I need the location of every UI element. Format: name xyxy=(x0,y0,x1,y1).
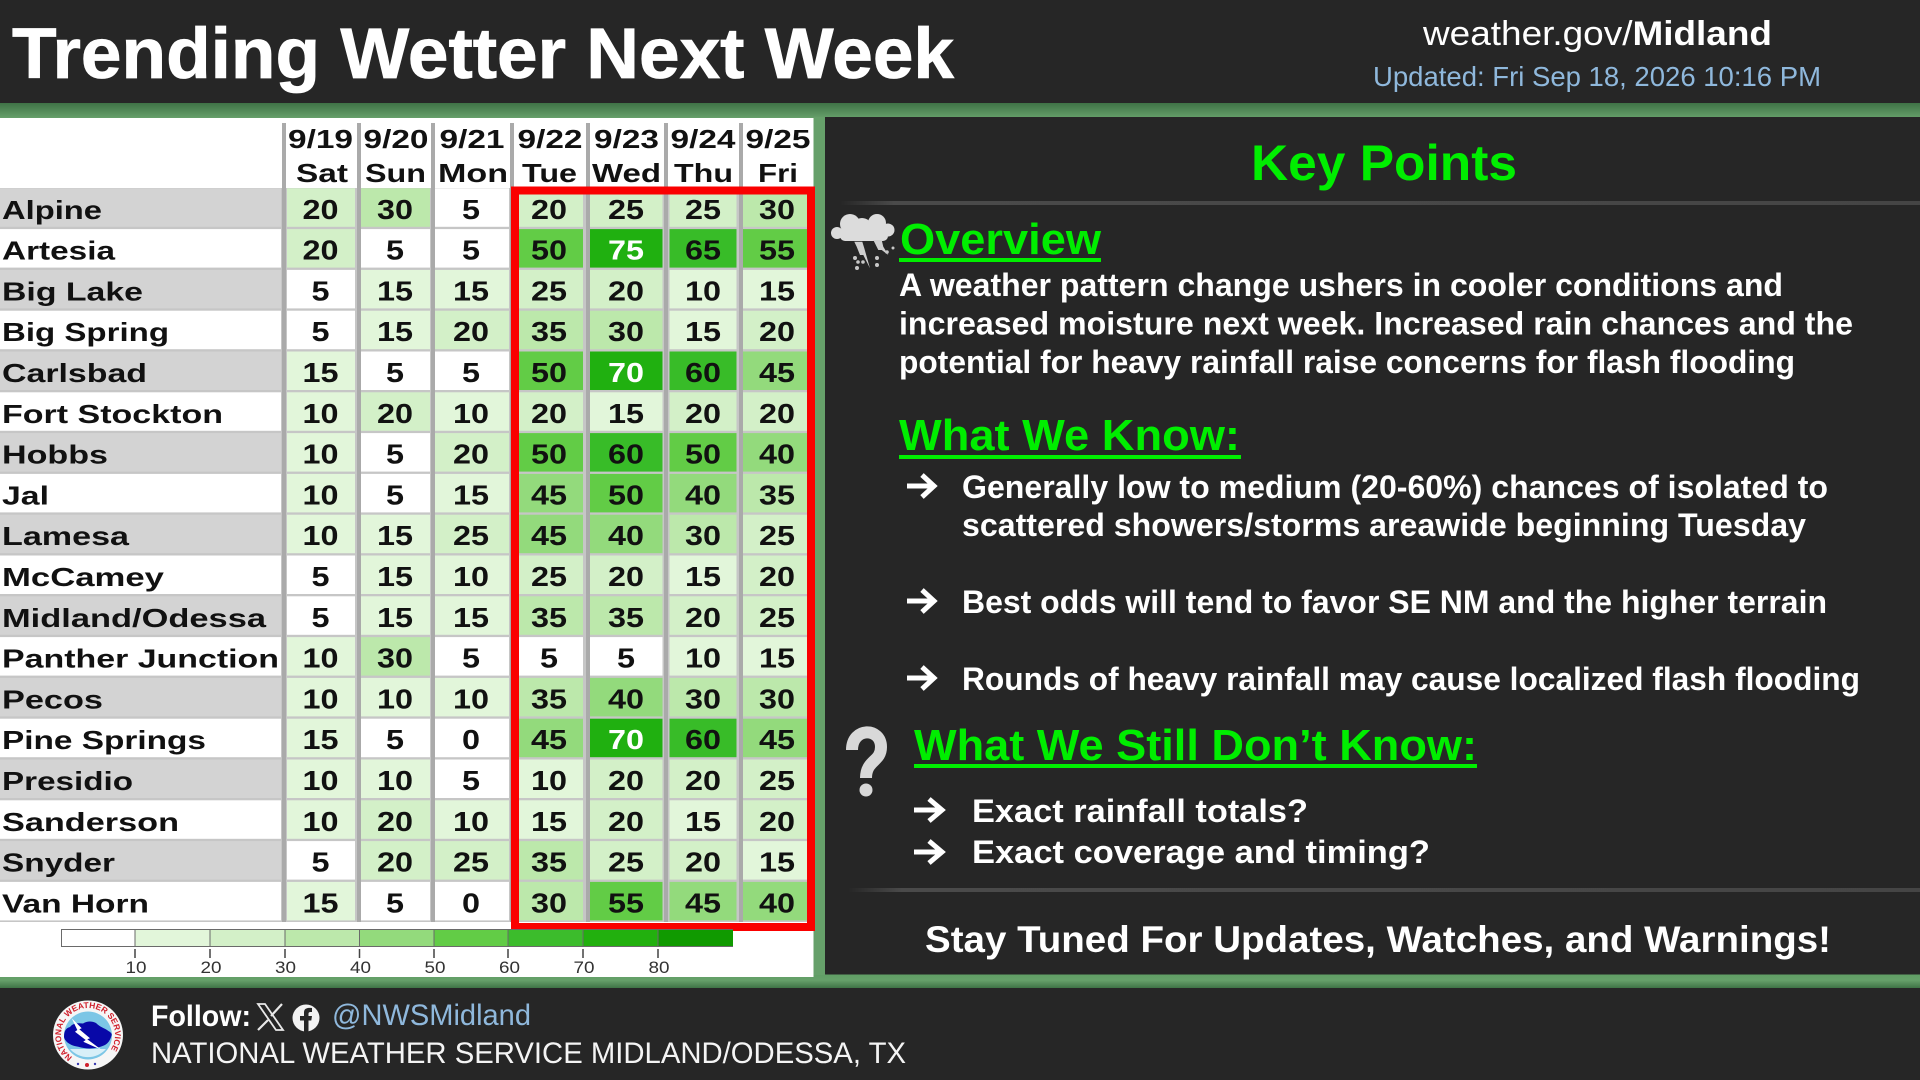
row: Alpine: 5 xyxy=(462,194,480,225)
color scale legend: 10 xyxy=(126,958,146,977)
row: Presidio: 20 xyxy=(685,765,721,796)
column headers: 9/25 xyxy=(746,124,810,154)
icon: question mark xyxy=(852,732,881,796)
row: Jal: 40 xyxy=(685,479,721,510)
row: Van Horn xyxy=(0,882,808,920)
color scale legend: 20 xyxy=(200,958,222,977)
row: Big Lake: 15 xyxy=(377,275,413,306)
row: Pecos: 35 xyxy=(531,683,567,714)
row: Snyder: 25 xyxy=(453,847,489,878)
still do not know heading: What We Still Don’t Know: xyxy=(914,721,1477,770)
bullet: chances: scattered showers/storms areawide beginning Tuesday xyxy=(962,507,1806,543)
row: Van Horn: 30 xyxy=(531,887,567,918)
row: Fort Stockton: 15 xyxy=(608,398,644,429)
row: Big Lake: 15 xyxy=(759,275,795,306)
row: Carlsbad: 70 xyxy=(608,357,644,388)
row: Lamesa: 40 xyxy=(608,520,644,551)
row: Panther Junction: 5 xyxy=(462,643,480,674)
row: Big Spring: 30 xyxy=(608,316,644,347)
column headers: Thu xyxy=(674,158,733,188)
bullet: rainfall totals: Exact rainfall totals? xyxy=(972,793,1308,829)
color scale legend: 70 xyxy=(574,958,594,977)
row: Artesia: 20 xyxy=(302,235,338,266)
row: Big Lake: 20 xyxy=(608,275,644,306)
icon: Facebook xyxy=(292,1004,320,1032)
row: Pecos: 10 xyxy=(453,683,489,714)
row: Fort Stockton xyxy=(0,392,808,431)
row: Van Horn: 15 xyxy=(302,887,338,918)
row: Presidio: 10 xyxy=(531,765,567,796)
row: Midland/Odessa: 15 xyxy=(453,602,489,633)
row: Big Spring xyxy=(0,311,808,349)
row: Presidio xyxy=(0,760,808,798)
row: Midland/Odessa: Midland/Odessa xyxy=(2,603,267,633)
row: Hobbs: 60 xyxy=(608,439,644,470)
color scale legend: 60 xyxy=(499,958,520,977)
row: Van Horn: 55 xyxy=(608,887,644,918)
row: Panther Junction: 5 xyxy=(540,643,558,674)
social handle: @NWSMidland xyxy=(332,999,531,1032)
bottom green band xyxy=(0,974,1920,988)
office name: NATIONAL WEATHER SERVICE MIDLAND/ODESSA, TX xyxy=(151,1037,906,1070)
panel: key points xyxy=(825,117,1920,974)
column headers xyxy=(288,124,810,188)
row: Big Spring: 20 xyxy=(453,316,489,347)
row: Panther Junction: 10 xyxy=(685,643,721,674)
row: Sanderson xyxy=(0,800,808,839)
row: McCamey: 5 xyxy=(312,561,330,592)
row: Big Spring: Big Spring xyxy=(2,317,169,347)
row: Sanderson: 10 xyxy=(302,806,338,837)
bullet: best odds: Best odds will tend to favor SE NM and the higher terrain xyxy=(962,584,1827,620)
row: Lamesa: 25 xyxy=(759,520,795,551)
row: Jal: 45 xyxy=(531,479,567,510)
overview paragraph: A weather pattern change ushers in cooler conditions and xyxy=(899,267,1783,303)
bullet: chances: Generally low to medium (20-60%) chances of isolated to xyxy=(962,469,1828,505)
row: Panther Junction xyxy=(0,637,808,676)
row: Jal: Jal xyxy=(2,480,49,510)
row: Lamesa: 25 xyxy=(453,520,489,551)
row: Jal: 50 xyxy=(608,479,644,510)
row: Jal xyxy=(0,474,808,512)
row: Presidio: 20 xyxy=(608,765,644,796)
row: Pine Springs: 60 xyxy=(685,724,721,755)
title: Trending Wetter Next Week xyxy=(12,15,955,94)
row: McCamey: 15 xyxy=(377,561,413,592)
green gutter between panels xyxy=(813,117,826,975)
row: Lamesa: 45 xyxy=(531,520,567,551)
row: Sanderson: 15 xyxy=(531,806,567,837)
follow label: Follow: xyxy=(151,1000,251,1033)
row: Artesia: 5 xyxy=(462,235,480,266)
color scale legend: 50 xyxy=(424,958,446,977)
row: Carlsbad: 5 xyxy=(462,357,480,388)
row: Pecos: 10 xyxy=(302,683,338,714)
row: Artesia: 65 xyxy=(685,235,721,266)
arrow xyxy=(907,475,934,497)
what we know heading: What We Know: xyxy=(899,411,1240,460)
row: Presidio: 25 xyxy=(759,765,795,796)
row: McCamey: 20 xyxy=(608,561,644,592)
row: McCamey: 20 xyxy=(759,561,795,592)
row: Midland/Odessa: 25 xyxy=(759,602,795,633)
row: Fort Stockton: 20 xyxy=(759,398,795,429)
red highlight box xyxy=(515,190,811,927)
column headers: 9/21 xyxy=(440,124,504,154)
row: Jal: 10 xyxy=(302,479,338,510)
row: Alpine: 30 xyxy=(759,194,795,225)
row: Jal: 15 xyxy=(453,479,489,510)
overview paragraph xyxy=(899,267,1853,380)
row: Pine Springs: 5 xyxy=(386,724,404,755)
row: Van Horn: 40 xyxy=(759,887,795,918)
column headers: Sun xyxy=(365,158,426,188)
row: Hobbs: 20 xyxy=(453,439,489,470)
row: Panther Junction: 5 xyxy=(617,643,635,674)
row: Big Lake: 25 xyxy=(531,275,567,306)
row: Lamesa: 30 xyxy=(685,520,721,551)
row: Big Spring: 15 xyxy=(377,316,413,347)
row: Lamesa: 10 xyxy=(302,520,338,551)
row: Carlsbad: 5 xyxy=(386,357,404,388)
row: Lamesa xyxy=(0,515,808,553)
key points heading: Key Points xyxy=(1251,135,1517,191)
row: Big Lake: 10 xyxy=(685,275,721,306)
row: Sanderson: 20 xyxy=(377,806,413,837)
row: Presidio: Presidio xyxy=(2,766,133,796)
row: Panther Junction: 10 xyxy=(302,643,338,674)
row: Alpine: 20 xyxy=(302,194,338,225)
row: Artesia: Artesia xyxy=(2,236,116,266)
arrow xyxy=(907,590,934,612)
row: Artesia xyxy=(0,229,808,268)
row: Artesia: 50 xyxy=(531,235,567,266)
row: Big Spring: 35 xyxy=(531,316,567,347)
arrow xyxy=(914,799,942,821)
closing message: Stay Tuned For Updates, Watches, and Warnings! xyxy=(925,919,1831,960)
row: Alpine: 25 xyxy=(608,194,644,225)
row: Panther Junction: 15 xyxy=(759,643,795,674)
row: Sanderson: Sanderson xyxy=(2,807,179,837)
row: Pecos xyxy=(0,678,808,716)
column headers: 9/24 xyxy=(670,124,736,154)
column headers: 9/22 xyxy=(518,124,582,154)
row: Fort Stockton: 10 xyxy=(453,398,489,429)
row: Pine Springs: 70 xyxy=(608,724,644,755)
row: Lamesa: 15 xyxy=(377,520,413,551)
row: Pecos: 40 xyxy=(608,683,644,714)
arrow xyxy=(914,841,942,863)
row: Snyder: 15 xyxy=(759,847,795,878)
column headers: Sat xyxy=(296,158,348,188)
row: Presidio: 10 xyxy=(377,765,413,796)
row: Alpine: Alpine xyxy=(2,195,102,225)
row: Carlsbad: 45 xyxy=(759,357,795,388)
column headers: Tue xyxy=(522,158,577,188)
row: Lamesa: Lamesa xyxy=(2,521,130,551)
row: Van Horn: 0 xyxy=(462,887,480,918)
row: Van Horn: 45 xyxy=(685,887,721,918)
row: Hobbs: 50 xyxy=(531,439,567,470)
icon: X xyxy=(258,1004,283,1030)
row: Fort Stockton: 10 xyxy=(302,398,338,429)
row: Snyder xyxy=(0,841,808,880)
row: Pine Springs: 15 xyxy=(302,724,338,755)
row: Pecos: 30 xyxy=(759,683,795,714)
row: Van Horn: 5 xyxy=(386,887,404,918)
row: Presidio: 10 xyxy=(302,765,338,796)
column headers: Fri xyxy=(758,158,798,188)
bullet: chances xyxy=(962,469,1828,543)
row: McCamey xyxy=(0,556,808,594)
row: Hobbs: 5 xyxy=(386,439,404,470)
row: Alpine xyxy=(0,188,808,227)
row: Snyder: 20 xyxy=(377,847,413,878)
row: Big Spring: 5 xyxy=(312,316,330,347)
row: McCamey: 10 xyxy=(453,561,489,592)
row: Big Lake: Big Lake xyxy=(2,276,143,306)
row: Sanderson: 10 xyxy=(453,806,489,837)
row: Fort Stockton: 20 xyxy=(377,398,413,429)
row: Alpine: 30 xyxy=(377,194,413,225)
row: Hobbs: 50 xyxy=(685,439,721,470)
color scale legend: 40 xyxy=(350,958,371,977)
row: McCamey: 15 xyxy=(685,561,721,592)
row: Carlsbad: 60 xyxy=(685,357,721,388)
row: Pine Springs: 45 xyxy=(531,724,567,755)
panel: precipitation probability table xyxy=(0,118,814,977)
column headers: 9/23 xyxy=(594,124,659,154)
row: Snyder: Snyder xyxy=(2,848,115,878)
row: Presidio: 5 xyxy=(462,765,480,796)
row: Artesia: 75 xyxy=(608,235,644,266)
row: Snyder: 5 xyxy=(312,847,330,878)
updated timestamp: Updated: Fri Sep 18, 2026 10:16 PM xyxy=(1373,61,1821,92)
color scale legend: 80 xyxy=(648,958,670,977)
icon: NWS logo: NATIONAL WEATHER SERVICE xyxy=(55,1002,121,1062)
row: Alpine: 20 xyxy=(531,194,567,225)
row: Jal: 35 xyxy=(759,479,795,510)
column headers: Wed xyxy=(592,158,661,188)
row: Snyder: 25 xyxy=(608,847,644,878)
row: Snyder: 35 xyxy=(531,847,567,878)
website link: weather.gov/ Midland xyxy=(1422,15,1772,53)
row: Pecos: 10 xyxy=(377,683,413,714)
row: Artesia: 55 xyxy=(759,235,795,266)
bullet: coverage and timing: Exact coverage and timing? xyxy=(972,834,1430,870)
bullet: flash flooding: Rounds of heavy rainfall may cause localized flash flooding xyxy=(962,661,1860,697)
row: Midland/Odessa: 20 xyxy=(685,602,721,633)
row: McCamey: 25 xyxy=(531,561,567,592)
row: Midland/Odessa: 5 xyxy=(312,602,330,633)
row: Sanderson: 20 xyxy=(608,806,644,837)
row: Carlsbad xyxy=(0,352,808,390)
row: Carlsbad: 15 xyxy=(302,357,338,388)
overview paragraph: potential for heavy rainfall raise concerns for flash flooding xyxy=(899,344,1795,380)
column headers: 9/19 xyxy=(288,124,353,154)
row: Pine Springs: 0 xyxy=(462,724,480,755)
row: Fort Stockton: 20 xyxy=(531,398,567,429)
row: Jal: 5 xyxy=(386,479,404,510)
overview heading: Overview xyxy=(900,215,1102,264)
column headers: Mon xyxy=(438,158,508,188)
row: Pecos: 30 xyxy=(685,683,721,714)
row: Big Lake xyxy=(0,270,808,308)
row: Carlsbad: Carlsbad xyxy=(2,358,147,388)
icon: thunderstorm cloud xyxy=(831,214,894,270)
row: Artesia: 5 xyxy=(386,235,404,266)
row: Big Lake: 15 xyxy=(453,275,489,306)
row: Pine Springs: Pine Springs xyxy=(2,725,206,755)
row: Big Spring: 15 xyxy=(685,316,721,347)
row: Alpine: 25 xyxy=(685,194,721,225)
row: Sanderson: 15 xyxy=(685,806,721,837)
row: Fort Stockton: 20 xyxy=(685,398,721,429)
row: Pine Springs xyxy=(0,719,808,757)
row: Pecos: Pecos xyxy=(2,684,103,714)
row: Sanderson: 20 xyxy=(759,806,795,837)
footer xyxy=(53,999,906,1070)
row: Van Horn: Van Horn xyxy=(2,888,149,918)
row: Hobbs: Hobbs xyxy=(2,440,108,470)
column headers: 9/20 xyxy=(364,124,428,154)
arrow xyxy=(907,667,934,689)
row: Pine Springs: 45 xyxy=(759,724,795,755)
overview paragraph: increased moisture next week. Increased rain chances and the xyxy=(899,306,1853,342)
row: Fort Stockton: Fort Stockton xyxy=(2,399,223,429)
row: Midland/Odessa: 35 xyxy=(608,602,644,633)
row: Big Spring: 20 xyxy=(759,316,795,347)
color scale legend xyxy=(61,929,733,977)
row: Carlsbad: 50 xyxy=(531,357,567,388)
row: Hobbs: 40 xyxy=(759,439,795,470)
row: Midland/Odessa: 15 xyxy=(377,602,413,633)
row: Snyder: 20 xyxy=(685,847,721,878)
row: Panther Junction: 30 xyxy=(377,643,413,674)
color scale legend: 30 xyxy=(275,958,296,977)
row: Big Lake: 5 xyxy=(312,275,330,306)
row: Hobbs xyxy=(0,433,808,472)
row: Hobbs: 10 xyxy=(302,439,338,470)
row: Midland/Odessa xyxy=(0,596,808,635)
row: McCamey: McCamey xyxy=(2,562,165,592)
top green band xyxy=(0,103,1920,118)
row: Panther Junction: Panther Junction xyxy=(2,644,279,674)
row: Midland/Odessa: 35 xyxy=(531,602,567,633)
